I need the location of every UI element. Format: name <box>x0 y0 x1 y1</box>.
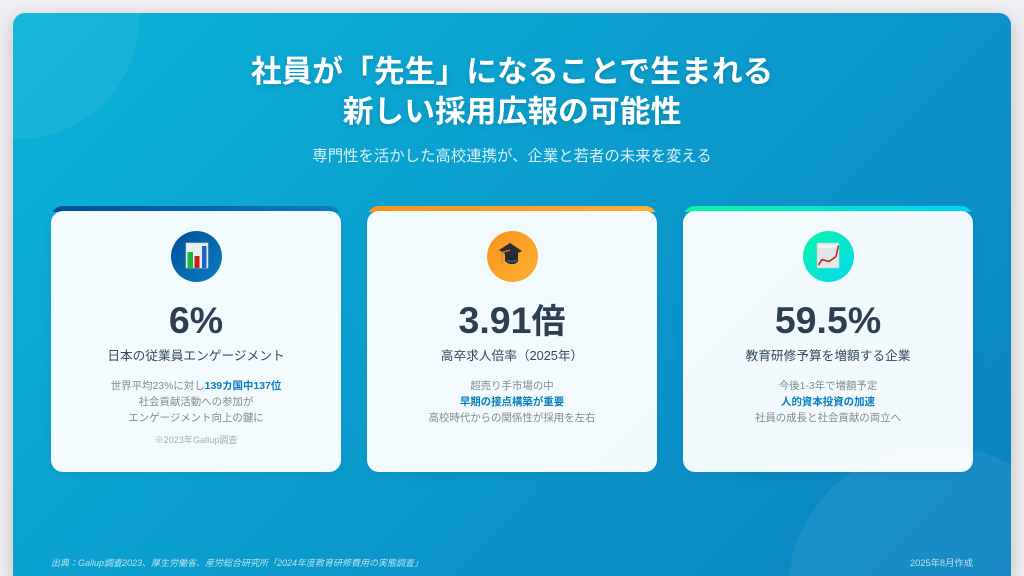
panel: training budget <box>683 206 973 472</box>
title <box>251 54 773 128</box>
panel: engagement <box>51 206 341 472</box>
icon: bar chart <box>170 231 222 282</box>
description: 今後1-3年で増額予定 <box>779 380 877 392</box>
label: 教育研修予算を増額する企業 <box>746 348 910 362</box>
title: 社員が「先生」になることで生まれる <box>251 54 773 88</box>
description: 人的資本投資の加速 <box>781 397 875 408</box>
description: 社会貢献活動への参加が <box>139 397 253 408</box>
statistic: 3.91倍: 3.91倍 <box>458 299 566 341</box>
label: 高卒求人倍率（2025年） <box>441 348 583 362</box>
statistic: 59.5%: 59.5% <box>775 299 881 341</box>
creation date: 2025年8月作成 <box>910 558 973 568</box>
description: エンゲージメント向上の鍵に <box>128 413 264 424</box>
source footnote: 出典：Gallup調査2023、厚生労働省、産労総合研究所「2024年度教育研修費用の実態調査」 <box>51 558 423 568</box>
label: 日本の従業員エンゲージメント <box>107 348 285 362</box>
statistic: 6%: 6% <box>169 299 223 341</box>
panel: job openings ratio <box>367 206 657 472</box>
description: 早期の接点構築が重要 <box>460 397 564 408</box>
description: 高校時代からの関係性が採用を左右 <box>428 413 596 424</box>
icon: graduation cap <box>486 231 538 282</box>
description: 世界平均23%に対し139カ国中137位 <box>111 380 281 392</box>
description <box>755 380 901 424</box>
description <box>428 380 596 424</box>
description: 社員の成長と社会貢献の両立へ <box>755 413 901 424</box>
source note: ※2023年Gallup調査 <box>155 434 237 444</box>
description <box>111 380 282 424</box>
icon: line chart <box>802 231 854 282</box>
description: 超売り手市場の中 <box>470 380 554 392</box>
subtitle: 専門性を活かした高校連携が、企業と若者の未来を変える <box>312 148 712 164</box>
title: 新しい採用広報の可能性 <box>343 94 681 128</box>
